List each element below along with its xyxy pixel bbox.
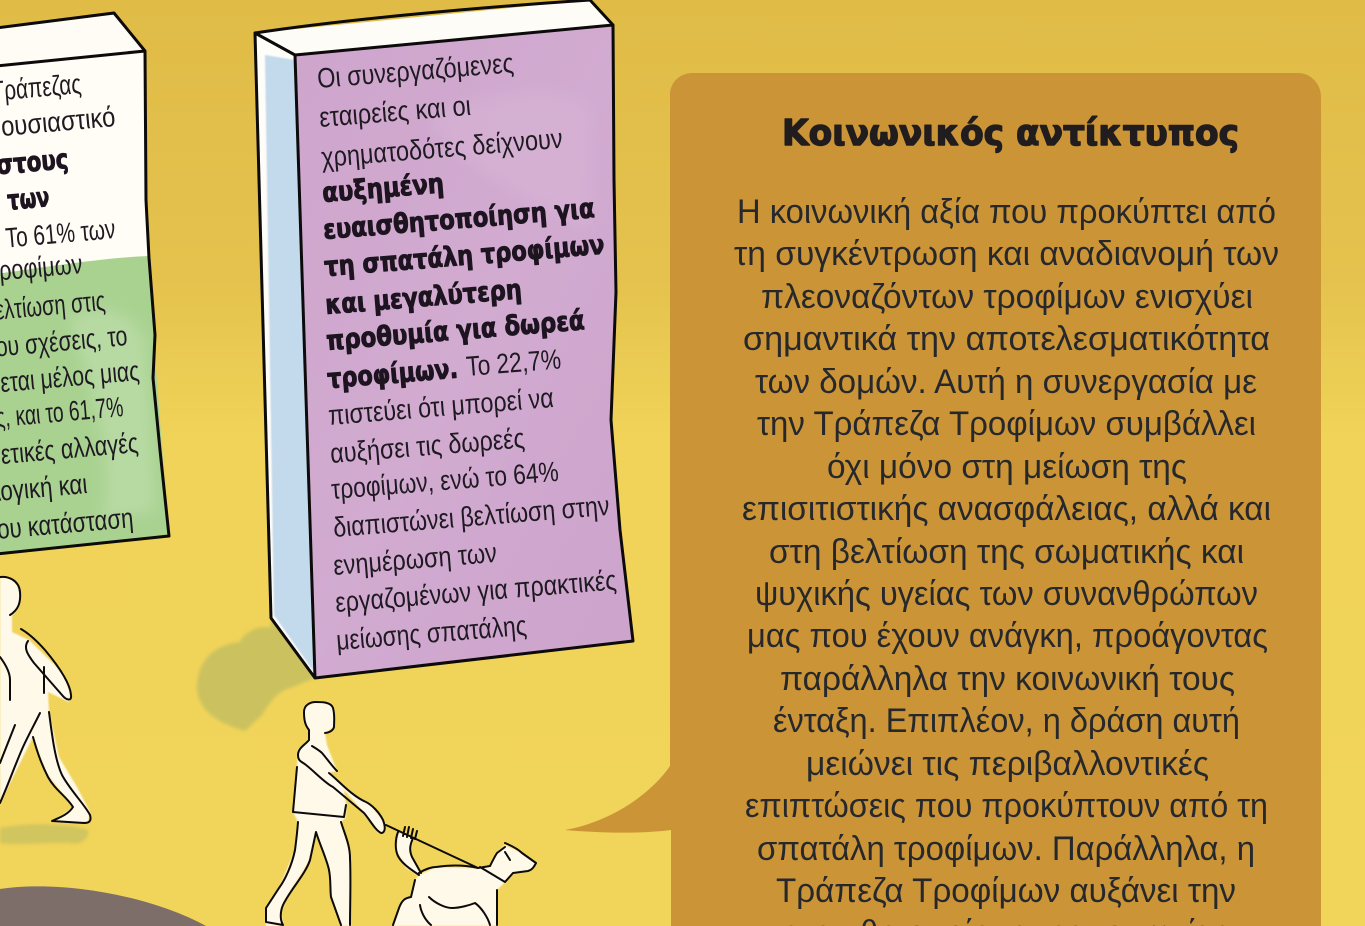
text block: social impact description: Τράπεζα Τροφίμων αυξάνει την (776, 872, 1236, 910)
text: purple panel copy (316, 47, 618, 656)
text: purple panel copy: διαπιστώνει βελτίωση στην (332, 490, 611, 543)
icon: dog on leash (386, 825, 536, 926)
text: purple panel copy: αυξημένη (321, 168, 445, 209)
text: purple panel copy: ενημέρωση των (332, 537, 498, 581)
heading: social impact: Κοινωνικός αντίκτυπος (782, 113, 1239, 154)
text block: social impact description: όχι μόνο στη μείωση της (827, 448, 1187, 486)
text: purple panel copy: και μεγαλύτερη (324, 274, 523, 321)
text block: social impact description: στη βελτίωση της σωματικής και (769, 533, 1244, 571)
text: purple panel copy: εταιρείες και οι (318, 90, 472, 133)
text block: social impact description (734, 193, 1279, 926)
text: purple panel copy: τροφίμων, ενώ το 64% (330, 456, 560, 505)
text: purple panel copy: Οι συνεργαζόμενες (316, 47, 515, 94)
text: left panel copy: Το 61% των (4, 213, 117, 254)
text: purple panel copy: Το 22,7% (465, 343, 562, 382)
shadow blob behind purple panel (197, 600, 315, 731)
text: purple panel copy: τροφίμων. (326, 354, 459, 395)
figure: person walking dog (266, 702, 536, 926)
text: purple panel copy: εργαζομένων για πρακτικές (334, 564, 618, 618)
text: purple panel copy: τη σπατάλη τροφίμων (323, 230, 606, 283)
text block: social impact description: παράλληλα την κοινωνική τους (780, 660, 1235, 698)
text block: social impact description: μας που έχουν ανάγκη, προάγοντας (747, 617, 1268, 655)
text: purple panel copy: ευαισθητοποίηση για (322, 193, 596, 246)
text: purple panel copy: πιστεύει ότι μπορεί να (327, 382, 555, 431)
text block: social impact description: επισιτιστικής ανασφάλειας, αλλά και (742, 490, 1271, 528)
panel: left white and green block (0, 13, 169, 554)
text block: social impact description: επιπτώσεις που προκύπτουν από τη (745, 787, 1268, 825)
text block: social impact description: πλεοναζόντων τροφίμων ενισχύει (761, 278, 1253, 316)
text block: social impact description: Η κοινωνική αξία που προκύπτει από (737, 193, 1276, 231)
callout: social impact speech bubble (565, 73, 1321, 926)
text block: social impact description: μειώνει τις περιβαλλοντικές (806, 745, 1209, 783)
text block: social impact description: τη συγκέντρωση και αναδιανομή των (734, 235, 1279, 273)
text block: social impact description: σημαντικά την αποτελεσματικότητα (743, 320, 1270, 358)
figure: walking person left (0, 577, 91, 844)
shape: dark grey hill bottom left (0, 886, 206, 926)
text: purple panel copy: μείωσης σπατάλης (335, 610, 528, 656)
text: purple panel copy: προθυμία για δωρεά (325, 305, 586, 357)
text block: social impact description: ένταξη. Επιπλέον, η δράση αυτή (773, 702, 1240, 740)
text: left panel copy: των (6, 182, 51, 217)
text: purple panel copy: χρηματοδότες δείχνουν (320, 123, 564, 173)
text block: social impact description: σπατάλη τροφίμων. Παράλληλα, η (757, 830, 1255, 868)
text block: social impact description: των δομών. Αυτή η συνεργασία με (755, 363, 1257, 401)
text: left panel copy (0, 68, 141, 546)
text block: social impact description: ψυχικής υγείας των συνανθρώπων (755, 575, 1258, 613)
text: purple panel copy: αυξήσει τις δωρεές (329, 422, 526, 469)
text block: social impact description: την Τράπεζα Τροφίμων συμβάλλει (757, 405, 1256, 443)
panel: purple block (255, 0, 633, 678)
